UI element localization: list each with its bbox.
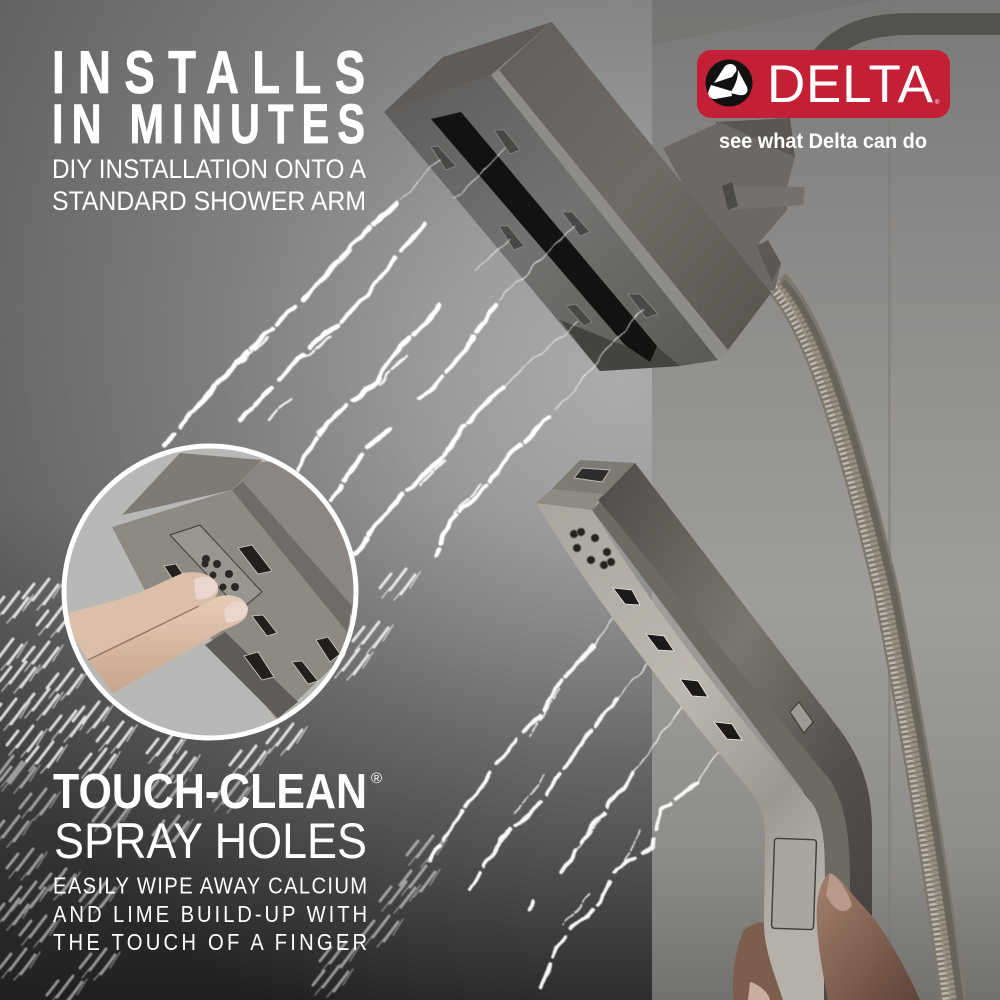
inset: front face of head — [112, 490, 350, 720]
heading: touch-clean spray holes — [53, 765, 382, 869]
background: shower wall left — [0, 0, 652, 1000]
head: side face — [499, 22, 771, 350]
logo: tagline: see what Delta can do — [719, 130, 927, 153]
hand shower: edge line — [592, 502, 850, 1000]
hand shower: side body — [598, 463, 872, 930]
hand: fingers and thumb holding the shower — [733, 873, 920, 1000]
text: touch-clean description — [53, 872, 367, 955]
hand shower: lower edge — [824, 880, 840, 1000]
logo: emblem — [706, 60, 752, 106]
head: lower dark lip — [560, 320, 680, 371]
heading: touch-clean spray holes: ® — [371, 770, 382, 787]
hand shower: top lip — [536, 489, 603, 510]
heading: installs in minutes: IN MINUTES — [52, 93, 365, 156]
hand shower: Touch-Clean holes — [570, 528, 615, 569]
head: nozzles — [431, 130, 658, 326]
inset: spray holes — [202, 555, 239, 591]
hand shower — [536, 460, 872, 1000]
inset: lower finger — [88, 595, 248, 693]
inset: holes plate — [170, 525, 262, 610]
hand shower: end cap — [552, 460, 635, 496]
background: tiled wall right — [652, 0, 1000, 1000]
text: installation description: DIY INSTALLATION ONTO A — [52, 154, 366, 184]
hand shower: mode button — [771, 838, 817, 930]
swivel mount — [663, 118, 805, 292]
text: touch-clean description: EASILY WIPE AWAY CALCIUM — [53, 872, 367, 899]
inset: background — [66, 448, 352, 736]
inset: crease between fingers — [88, 606, 199, 660]
head: dark slot — [431, 112, 657, 362]
inset: lower dark edge — [205, 632, 298, 718]
heading: installs in minutes: INSTALLS — [52, 40, 365, 107]
text: installation description: STANDARD SHOWER ARM — [52, 186, 366, 216]
lower left water spray — [0, 569, 447, 1000]
inset: edge strip — [232, 482, 352, 632]
text: installation description — [52, 154, 366, 216]
heading: installs in minutes — [52, 40, 365, 156]
head: edge strip — [491, 70, 728, 360]
heading: touch-clean spray holes: SPRAY HOLES — [54, 813, 367, 869]
logo: wordmark: DELTA — [767, 55, 934, 114]
hand shower: cap opening — [574, 468, 610, 482]
flexible hose — [770, 282, 960, 1000]
inset: white ring — [64, 446, 356, 738]
inset: top face of head — [122, 453, 262, 515]
heading: touch-clean spray holes: TOUCH-CLEAN — [53, 765, 367, 819]
inset: upper finger — [60, 572, 218, 660]
upper shower head — [384, 22, 771, 371]
logo: Delta badge — [697, 50, 950, 118]
head: front face — [384, 75, 718, 371]
inset: rectangular nozzles — [164, 545, 340, 684]
text: touch-clean description: THE TOUCH OF A FINGER — [53, 929, 367, 955]
head: top face — [384, 22, 552, 112]
hand shower: side window — [790, 702, 813, 733]
water streams from hand shower — [430, 606, 727, 990]
inset: side face of head — [232, 462, 354, 616]
inset circle: finger wiping spray holes — [60, 440, 370, 750]
hand shower: spray nozzles — [613, 588, 742, 740]
water streams from upper head — [165, 148, 642, 555]
text: touch-clean description: AND LIME BUILD-UP WITH — [53, 901, 367, 927]
shower arm — [820, 24, 1000, 60]
logo: Delta badge: ® — [935, 99, 940, 106]
inset: fingernails — [194, 577, 218, 599]
hand shower: front face — [536, 503, 825, 1000]
